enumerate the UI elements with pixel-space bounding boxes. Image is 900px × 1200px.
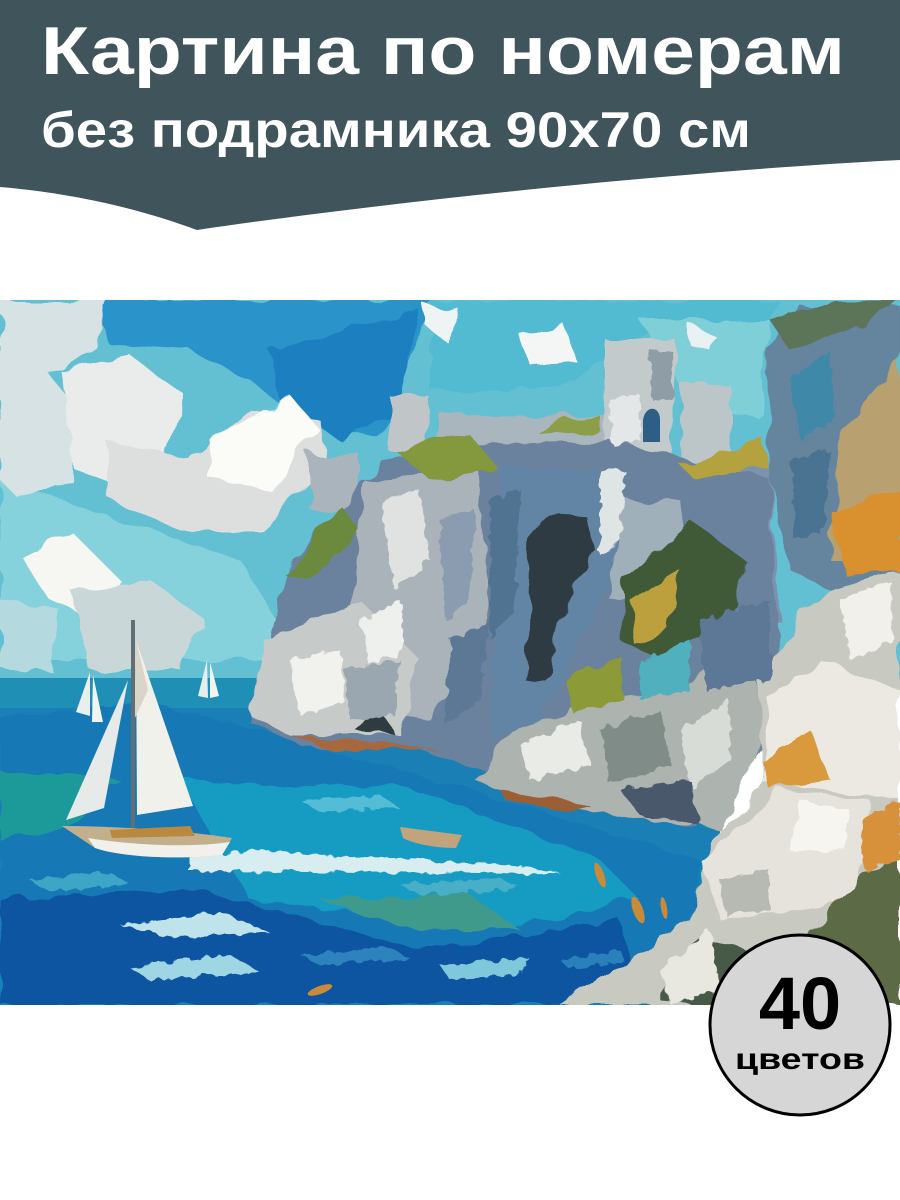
painting: coastal castle and sailboats xyxy=(0,300,900,1008)
distant sailboats xyxy=(76,660,219,722)
badge: 40 colours xyxy=(710,935,890,1115)
badge number: 40 xyxy=(759,962,841,1045)
foreground rocks xyxy=(475,670,762,832)
right cliff xyxy=(768,305,900,590)
clouds xyxy=(0,300,715,670)
central cliff mass xyxy=(248,440,780,830)
vegetation xyxy=(285,505,360,575)
brushwork on the rocks xyxy=(290,350,900,1005)
sea xyxy=(0,678,720,1008)
sky xyxy=(0,300,900,690)
reeds xyxy=(306,861,669,998)
cave arch xyxy=(525,510,595,680)
subtitle: без подрамника 90х70 см xyxy=(41,102,751,158)
tower window xyxy=(643,409,660,442)
back wall and towers xyxy=(310,338,780,640)
shoreline accents xyxy=(290,735,440,750)
title: Картина по номерам xyxy=(41,13,845,89)
small boat xyxy=(400,827,462,848)
main sailboat xyxy=(62,620,232,857)
castle and cliffs xyxy=(248,300,900,1005)
badge label: цветов xyxy=(735,1043,865,1076)
header banner xyxy=(0,0,900,230)
